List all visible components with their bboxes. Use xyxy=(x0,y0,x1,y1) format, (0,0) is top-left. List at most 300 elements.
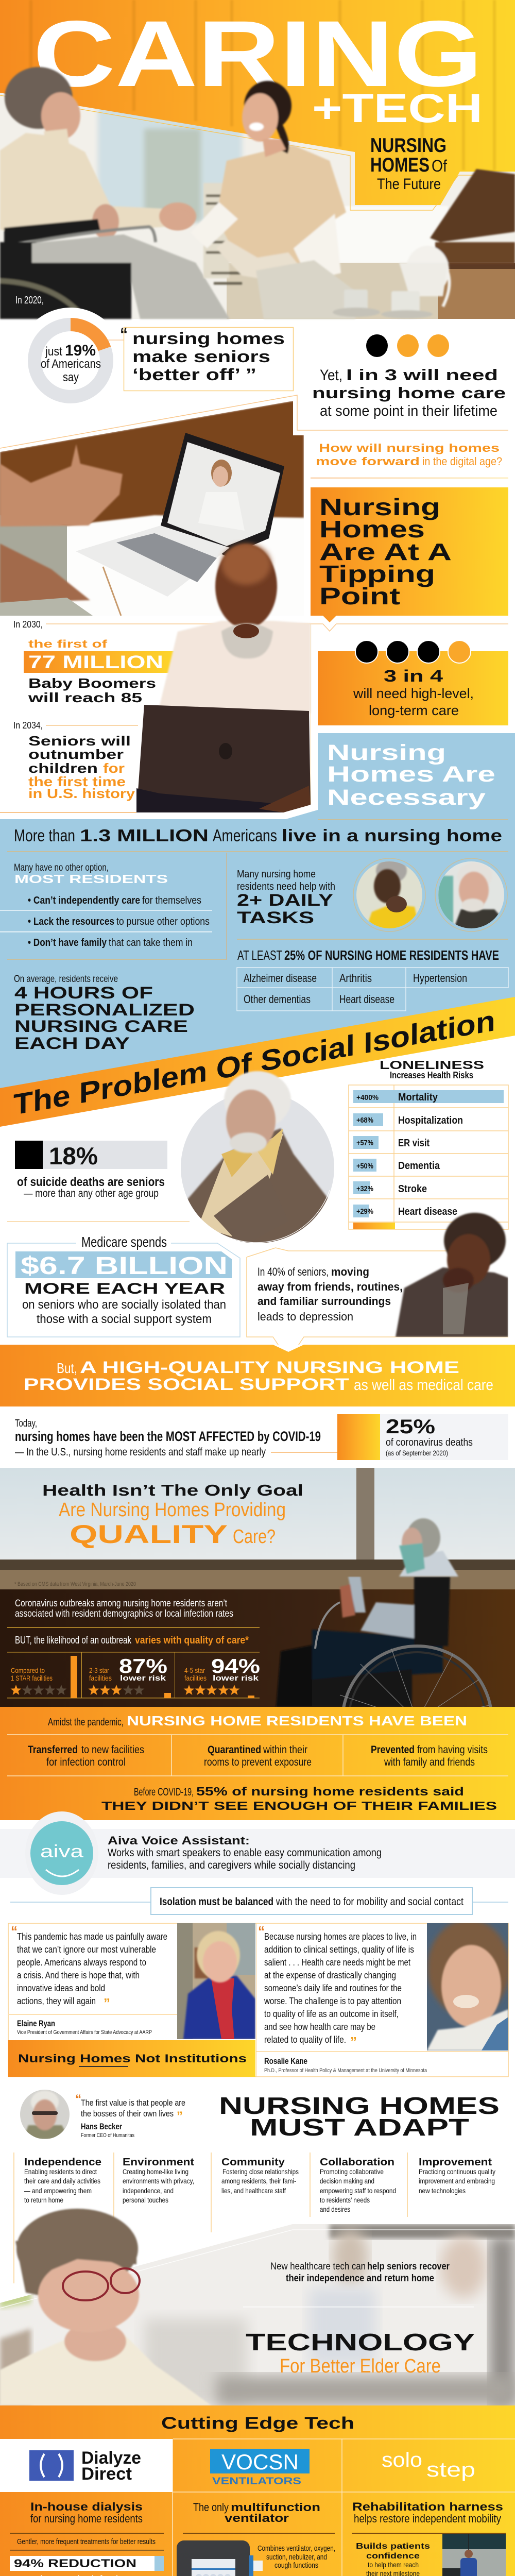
logo: vocsn ventilators: VOCSN xyxy=(221,2450,299,2474)
text: 4 hours of care: 4 HOURS OF xyxy=(14,984,153,1002)
band: residents during the pandemic: 55% of nursing home residents said xyxy=(196,1785,464,1798)
photo: hans becker xyxy=(20,2090,70,2140)
quote: hans becker: the bosses of their own lives xyxy=(81,2109,174,2119)
value labels: +68% xyxy=(356,1116,373,1125)
subtitle: NURSING xyxy=(370,134,447,157)
column: rehabilitation harness: confidence xyxy=(366,2552,420,2561)
values: improvement: new technologies xyxy=(419,2187,466,2195)
title +TECH: +TECH xyxy=(312,85,483,131)
quote: hans becker: The first value is that people are xyxy=(81,2098,185,2108)
panel: 3 in 4: will need high-level, xyxy=(353,686,474,701)
column: ventilator: ventilator xyxy=(225,2512,289,2524)
values: collaboration: to residents’ needs xyxy=(320,2196,370,2204)
panel: 3 in 4 xyxy=(318,640,508,725)
value labels: +57% xyxy=(356,1139,373,1147)
table: resident conditions: Arthritis xyxy=(339,972,372,985)
list: most residents: • Can’t independently care xyxy=(28,895,140,906)
logo: vocsn ventilators xyxy=(210,2449,310,2487)
table: resident conditions: AT LEAST xyxy=(237,947,282,963)
callout: medicare spends: Medicare spends xyxy=(81,1234,167,1250)
heading: technology: TECHNOLOGY xyxy=(246,2329,475,2355)
stat: 18 percent suicide: 18% xyxy=(49,1142,98,1170)
text: baby boomers timeline xyxy=(0,619,175,813)
table: resident conditions: Alzheimer disease xyxy=(244,972,317,985)
statistic: 1 in 3 xyxy=(312,334,506,419)
four to five star column: 4-5 star xyxy=(184,1666,205,1674)
value labels: +400% xyxy=(356,1093,379,1102)
band: residents during the pandemic: rooms to prevent exposure xyxy=(204,1756,312,1768)
heading box: tipping point xyxy=(311,487,508,622)
text: 4 hours of care: PERSONALIZED xyxy=(14,1001,195,1019)
band: residents during the pandemic: for infection control xyxy=(46,1756,126,1768)
text: outbreak association: Coronavirus outbreaks among nursing home residents aren’t xyxy=(15,1598,228,1609)
one star column: Compared to xyxy=(11,1666,45,1674)
text: outbreak association: associated with resident demographics or local infection rates xyxy=(15,1608,233,1619)
subtitle xyxy=(370,134,447,193)
callout: medicare spends: on seniors who are socially isolated than xyxy=(22,1298,226,1312)
band: quality nursing home social support: PROVIDES SOCIAL SUPPORT xyxy=(24,1375,350,1394)
value labels: +50% xyxy=(356,1162,373,1171)
image: ventilator device xyxy=(177,2540,263,2576)
donut chart: 19 percent: just xyxy=(45,345,62,359)
patient in wheelchair xyxy=(275,1577,492,1707)
two to three star column: facilities xyxy=(89,1674,112,1682)
quote: hans becker: Hans Becker xyxy=(81,2122,122,2131)
blurred clinic background xyxy=(0,2215,515,2406)
wood grain streaks xyxy=(31,0,494,170)
stat: 18 percent suicide: — more than any other age group xyxy=(24,1188,159,1199)
logo tile: dialyze direct: Direct xyxy=(81,2464,132,2484)
panel: aiva voice assistant: residents, families, and caregivers while socially distancing xyxy=(108,1859,355,1871)
quote: rosalie kane: and see how health care may be xyxy=(264,2022,375,2032)
list: most residents xyxy=(0,862,212,948)
table: resident conditions: Other dementias xyxy=(244,993,311,1006)
photo: elaine ryan xyxy=(177,1923,255,2039)
values: collaboration: Collaboration xyxy=(320,2157,394,2168)
values: environment: environments with privacy, xyxy=(123,2177,194,2185)
values: environment: independence, and xyxy=(123,2187,174,2195)
four to five star column xyxy=(183,1655,260,1695)
heading box: tipping point: Tipping xyxy=(319,561,435,587)
stat: 25 percent of coronavirus deaths xyxy=(337,1414,508,1460)
photo: older man on laptop xyxy=(136,544,311,812)
callout: nursing homes not institutions: Nursing Homes Not Institutions xyxy=(18,2052,247,2065)
quote: rosalie kane: at the expense of drastically changing xyxy=(264,1970,396,1980)
callout: moving leads to depression: away from friends, routines, xyxy=(258,1280,403,1293)
values: independence: Independence xyxy=(24,2157,101,2168)
callout: isolation must be balanced: Isolation must be balanced xyxy=(160,1896,273,1908)
callout: medicare spends: those with a social support system xyxy=(37,1312,212,1326)
values: collaboration: decision making and xyxy=(320,2177,374,2185)
quote: elaine ryan: innovative ideas and bold xyxy=(17,1983,105,1993)
text: 4 hours of care: NURSING CARE xyxy=(14,1017,188,1036)
callout: isolation must be balanced: with the need to for mobility and social contact xyxy=(276,1896,464,1908)
quote: rosalie kane: Rosalie Kane xyxy=(264,2056,307,2066)
column: ventilator: Combines ventilator, oxygen, xyxy=(258,2544,335,2553)
text: baby boomers timeline: in U.S. history xyxy=(28,786,135,801)
one star column: 1 STAR facilities xyxy=(11,1674,53,1682)
table: resident conditions: Heart disease xyxy=(339,993,394,1006)
list: most residents: that can take them in xyxy=(109,937,193,948)
quote box xyxy=(108,325,294,391)
column: ventilator xyxy=(177,2501,337,2576)
panel: technology for better elder care xyxy=(0,2209,515,2406)
statistic: 1 in 3: I in 3 will need xyxy=(346,366,498,384)
panel: aiva voice assistant: Works with smart speakers to enable easy communication among xyxy=(108,1847,382,1859)
logo: solostep: solo xyxy=(382,2449,422,2471)
photo: laptop telehealth xyxy=(0,397,309,618)
logo: solostep: step xyxy=(426,2459,475,2481)
value labels: Dementia xyxy=(398,1160,440,1172)
quote: hans becker: “ xyxy=(75,2092,81,2106)
panel: 19% public opinion xyxy=(18,308,506,419)
values: environment: Environment xyxy=(123,2157,194,2168)
statistic: 1 in 3: Yet, xyxy=(320,367,342,384)
hero photo background xyxy=(0,88,515,319)
list: most residents: • Don’t have family xyxy=(28,937,107,948)
text: covid-19 impact: — In the U.S., nursing home residents and staff make up nearly xyxy=(15,1446,266,1458)
panel: expert quotes xyxy=(8,1919,510,2077)
chart: loneliness health risks: Increases Health Risks xyxy=(390,1070,473,1080)
rule xyxy=(237,939,508,940)
keyline xyxy=(0,2230,515,2308)
values: independence xyxy=(24,2157,101,2204)
quote: elaine ryan: “ xyxy=(11,1923,18,1939)
heading: nursing homes must adapt: NURSING HOMES xyxy=(219,2092,500,2119)
column rules xyxy=(14,2153,407,2283)
callout: medicare spends xyxy=(7,1234,240,1337)
text: 4 hours of care: On average, residents receive xyxy=(14,974,118,985)
photo: resident woman xyxy=(353,858,425,931)
headline: 1.3 million: Americans xyxy=(213,826,277,845)
timeline line with notch xyxy=(46,624,508,631)
text: baby boomers timeline: 77 MILLION xyxy=(28,652,163,672)
icon: red glasses xyxy=(63,2268,140,2300)
column: rehabilitation harness xyxy=(352,2500,506,2576)
column: dialysis xyxy=(10,2500,164,2576)
text: outbreak association: varies with quality of care* xyxy=(135,1635,249,1646)
heading box: tipping point: Point xyxy=(319,583,400,609)
quote: elaine ryan: a crisis. And there is hope that, with xyxy=(17,1970,140,1980)
values: environment: Creating home-like living xyxy=(123,2168,188,2176)
column: dialysis: In-house dialysis xyxy=(30,2500,143,2513)
stat: 18 percent suicide: of suicide deaths are seniors xyxy=(17,1175,165,1189)
quote: hans becker: Former CEO of Humanitas xyxy=(81,2132,134,2139)
photo: wooden box and teaware xyxy=(333,169,515,318)
heading: technology: For Better Elder Care xyxy=(280,2355,441,2377)
panel: 3 in 4: 3 in 4 xyxy=(384,667,443,685)
gradient footer cell xyxy=(353,1223,395,1229)
values: improvement xyxy=(419,2157,495,2195)
risk bars xyxy=(71,1656,254,1698)
photo: resident man xyxy=(435,858,507,931)
list: most residents: MOST RESIDENTS xyxy=(14,872,168,886)
values: collaboration: Promoting collaborative xyxy=(320,2168,384,2176)
question: digital age: in the digital age? xyxy=(422,455,502,468)
quote: elaine ryan: Elaine Ryan xyxy=(17,2019,55,2028)
band: residents during the pandemic: THEY DIDN’T SEE ENOUGH OF THEIR FAMILIES xyxy=(101,1799,497,1812)
callout: moving leads to depression xyxy=(247,1248,508,1360)
values: community: Community xyxy=(221,2157,285,2168)
column: ventilator: suction, nebulizer, and xyxy=(266,2553,327,2562)
column: ventilator: The only xyxy=(193,2501,229,2514)
values: community xyxy=(221,2157,299,2195)
band: quality nursing home social support: But, xyxy=(57,1360,77,1376)
text: 2+ daily tasks xyxy=(237,869,335,927)
band: residents during the pandemic: with family and friends xyxy=(384,1756,475,1768)
quote: elaine ryan: Vice President of Government Affairs for State Advocacy at AARP xyxy=(17,2029,152,2036)
heading: nursing homes are necessary: Nursing xyxy=(327,740,446,765)
connector line around laptop photo xyxy=(0,395,508,448)
heading: nursing homes must adapt xyxy=(219,2092,500,2141)
headline: 1.3 million: More than xyxy=(14,826,75,845)
heading: nursing homes are necessary: Necessary xyxy=(327,785,486,810)
list: most residents: • Lack the resources xyxy=(28,916,114,927)
value labels: +29% xyxy=(356,1207,373,1216)
values: environment: personal touches xyxy=(123,2196,168,2204)
quote: rosalie kane: salient . . . Health care needs might be met xyxy=(264,1957,410,1968)
title CARING: CARING xyxy=(33,1,483,106)
quote: rosalie kane: addition to clinical settings, quality of life is xyxy=(264,1944,414,1955)
band: quality nursing home social support: A HIGH-QUALITY NURSING HOME xyxy=(80,1358,459,1377)
quote: elaine ryan: This pandemic has made us painfully aware xyxy=(17,1931,167,1942)
quote box: nursing homes xyxy=(132,329,285,348)
column: dialysis: for nursing home residents xyxy=(30,2512,143,2525)
four to five star column: lower risk xyxy=(213,1674,259,1683)
four to five star column: 94% xyxy=(211,1655,260,1677)
quote: elaine ryan: that we can’t ignore our most vulnerable xyxy=(17,1944,156,1955)
chart: loneliness health risks: LONELINESS xyxy=(380,1058,484,1072)
statistic: 1 in 3: at some point in their lifetime xyxy=(320,403,497,419)
text: new healthcare tech: help seniors recover xyxy=(367,2261,450,2272)
photo: thinking man xyxy=(396,1213,508,1337)
stat: 25 percent of coronavirus deaths: (as of September 2020) xyxy=(386,1449,448,1457)
values: collaboration: and desires xyxy=(320,2206,350,2213)
values: collaboration: empowering staff to respond xyxy=(320,2187,396,2195)
text: 2+ daily tasks: 2+ DAILY xyxy=(237,891,333,909)
value labels: ER visit xyxy=(398,1138,430,1149)
band: residents during the pandemic: Before COVID-19, xyxy=(134,1786,194,1798)
text: baby boomers timeline: Baby Boomers xyxy=(28,675,156,691)
table: resident conditions: Hypertension xyxy=(413,972,467,985)
heading: technology xyxy=(246,2329,475,2377)
subtitle: The Future xyxy=(377,176,441,193)
quote: rosalie kane: someone’s daily life and routines for the xyxy=(264,1983,402,1993)
text: 4 hours of care xyxy=(14,974,195,1053)
list: most residents: to pursue other options xyxy=(116,916,210,927)
logo: solostep xyxy=(382,2449,475,2481)
heading: nursing homes must adapt: MUST ADAPT xyxy=(250,2114,469,2141)
bars xyxy=(353,1090,504,1217)
photo: smiling older woman with glasses xyxy=(0,2209,211,2405)
panel: 3 in 4: long-term care xyxy=(369,703,459,718)
heading: nursing homes are necessary xyxy=(318,740,508,820)
photo: isolated older man xyxy=(181,1071,335,1247)
question: digital age: move forward xyxy=(316,455,420,468)
caption In 2020: In 2020, xyxy=(15,295,44,306)
column: rehabilitation harness: Rehabilitation harness xyxy=(352,2500,503,2513)
quote: rosalie kane: Ph.D., Professor of Health Policy & Management at the University of Minnesota xyxy=(264,2067,427,2074)
text: covid-19 impact: nursing homes have been the MOST AFFECTED by COVID-19 xyxy=(15,1429,321,1444)
stat: 25 percent of coronavirus deaths: of coronavirus deaths xyxy=(386,1437,473,1448)
two to three star column: lower risk xyxy=(120,1674,166,1683)
text: outbreak association: BUT, the likelihood of an outbreak xyxy=(15,1635,132,1646)
quote: elaine ryan: actions, they will again xyxy=(17,1996,96,2006)
heading: health isn't the only goal: QUALITY xyxy=(70,1520,228,1549)
quote: rosalie kane: “ xyxy=(258,1923,265,1939)
quote: elaine ryan: ” xyxy=(104,1995,110,2011)
values: collaboration xyxy=(320,2157,396,2213)
donut chart: 19 percent: of Americans xyxy=(41,357,101,371)
quote: rosalie kane: Because nursing homes are places to live, in xyxy=(264,1931,417,1942)
band: residents during the pandemic: NURSING HOME RESIDENTS HAVE BEEN xyxy=(127,1713,467,1728)
callout: moving leads to depression: In 40% of seniors, xyxy=(258,1265,329,1278)
table: resident conditions xyxy=(237,947,508,1011)
heading: nursing homes are necessary: Homes Are xyxy=(327,762,495,787)
column: dialysis: Gentler, more frequent treatments for better results xyxy=(17,2537,156,2546)
band: residents during the pandemic: Quarantined xyxy=(208,1744,261,1756)
headline: 1.3 million xyxy=(7,826,508,960)
text: new healthcare tech: their independence and return home xyxy=(286,2273,434,2284)
photo: patient in harness xyxy=(442,2534,506,2576)
column: dialysis: 94% REDUCTION xyxy=(14,2557,136,2570)
values: independence: their care and daily activities xyxy=(24,2177,100,2185)
callout: nursing homes not institutions xyxy=(8,2040,255,2077)
text: covid-19 impact xyxy=(15,1418,337,1458)
banner: the problem of social isolation: The Problem Of Social Isolation xyxy=(13,1004,495,1121)
subtitle: Of xyxy=(432,157,447,175)
values: environment xyxy=(123,2157,194,2204)
column: ventilator: multifunction xyxy=(231,2501,320,2514)
text: baby boomers timeline: In 2030, xyxy=(13,619,43,630)
band: quality nursing home social support: as well as medical care xyxy=(354,1377,493,1394)
quote: rosalie kane: to quality of life as an outcome in itself, xyxy=(264,2009,399,2019)
column: rehabilitation harness: Builds patients xyxy=(356,2542,430,2551)
text: baby boomers timeline: the first of xyxy=(28,638,108,650)
quote box: make seniors xyxy=(132,347,270,366)
text: new healthcare tech xyxy=(243,2261,474,2307)
quote box: ‘better off’ ” xyxy=(132,365,256,384)
text: covid-19 impact: Today, xyxy=(15,1418,37,1429)
headline: 1.3 million: live in a nursing home xyxy=(282,826,502,845)
quote: rosalie kane: worse. The challenge is to pay attention xyxy=(264,1996,401,2006)
text: baby boomers timeline: Seniors will xyxy=(28,733,131,749)
value labels: Heart disease xyxy=(398,1206,457,1217)
callout: moving leads to depression: moving xyxy=(331,1265,369,1278)
heading: health isn't the only goal xyxy=(42,1481,303,1549)
column: ventilator: cough functions xyxy=(274,2561,318,2570)
text: 2+ daily tasks: residents need help with xyxy=(237,881,335,892)
donut chart: 19 percent xyxy=(18,308,124,414)
list: most residents: Many have no other option, xyxy=(14,862,109,873)
value labels xyxy=(356,1092,463,1217)
subtitle: HOMES xyxy=(370,154,430,176)
hero panel xyxy=(0,0,515,319)
values: independence: to return home xyxy=(24,2196,63,2204)
callout: moving leads to depression: and familiar surroundings xyxy=(258,1295,391,1308)
heading box: tipping point: Are At A xyxy=(319,538,452,565)
quote: rosalie kane: ” xyxy=(350,2034,357,2049)
donut chart: 19 percent: say xyxy=(63,370,79,384)
logo tile: dialyze direct: Dialyze xyxy=(81,2448,141,2468)
band: residents during the pandemic xyxy=(0,1707,515,1820)
text: baby boomers timeline: for xyxy=(103,760,125,776)
question: digital age xyxy=(311,442,508,478)
panel: cutting edge tech xyxy=(0,2405,515,2576)
column: rehabilitation harness: to help them reach xyxy=(368,2561,419,2569)
values: independence: — and empowering them xyxy=(24,2187,92,2195)
values: community: lies, and healthcare staff xyxy=(221,2187,286,2195)
text: outbreak association xyxy=(7,1598,260,1653)
band: residents during the pandemic: Prevented xyxy=(371,1744,415,1756)
one star column xyxy=(10,1666,67,1695)
photo: rosalie kane xyxy=(427,1919,510,2050)
values: improvement: Practicing continuous quality xyxy=(419,2168,495,2176)
callout: medicare spends: $6.7 BILLION xyxy=(21,1252,228,1280)
band: residents during the pandemic: Amidst the pandemic, xyxy=(48,1717,124,1728)
value labels: Stroke xyxy=(398,1183,427,1195)
chart: loneliness health risks xyxy=(349,1058,508,1229)
aiva logo xyxy=(25,1811,98,1895)
aiva logo: aiva xyxy=(40,1842,83,1861)
band: residents during the pandemic: to new facilities xyxy=(81,1744,144,1756)
panel: aiva voice assistant xyxy=(0,1811,515,1895)
banner: the problem of social isolation xyxy=(0,997,515,1127)
heading: cutting edge tech: Cutting Edge Tech xyxy=(161,2414,354,2432)
heading box: tipping point: Homes xyxy=(319,516,425,543)
quote: rosalie kane: related to quality of life. xyxy=(264,2035,346,2045)
values: community: Fostering close relationships xyxy=(222,2168,299,2176)
logo: vocsn ventilators: VENTILATORS xyxy=(212,2476,301,2487)
text: 2+ daily tasks: Many nursing home xyxy=(237,869,316,880)
heading: health isn't the only goal: Are Nursing Homes Providing xyxy=(59,1499,286,1521)
heading box: tipping point: Nursing xyxy=(319,494,440,520)
callout: medicare spends: MORE EACH YEAR xyxy=(24,1280,225,1297)
two to three star column: 2-3 star xyxy=(89,1666,109,1674)
blue background panel xyxy=(0,733,515,1090)
quote: hans becker: ” xyxy=(177,2109,183,2123)
text: baby boomers timeline: will reach 85 xyxy=(28,690,142,705)
band: residents during the pandemic: from having visits xyxy=(417,1744,488,1756)
headline: 1.3 million: 1.3 MILLION xyxy=(80,826,209,845)
band: residents during the pandemic: within their xyxy=(263,1744,307,1756)
question: digital age: How will nursing homes xyxy=(319,442,500,454)
footnote: * Based on CMS data from West Virginia, March-June 2020 xyxy=(14,1581,136,1587)
logo tile: dialyze direct xyxy=(0,2439,173,2492)
two to three star column: 87% xyxy=(119,1655,167,1677)
stat: 18 percent suicide xyxy=(7,1141,190,1222)
callout: isolation must be balanced xyxy=(10,1888,508,1914)
text: 4 hours of care: EACH DAY xyxy=(14,1034,130,1053)
text: 2+ daily tasks: TASKS xyxy=(237,908,314,927)
quote: elaine ryan xyxy=(8,1923,177,2036)
donut chart: 19 percent: 19% xyxy=(65,342,96,359)
value labels: Mortality xyxy=(398,1092,438,1103)
band: residents during the pandemic: Transferred xyxy=(28,1744,78,1756)
band: quality nursing home social support xyxy=(0,1345,515,1406)
value labels: +32% xyxy=(356,1184,373,1193)
photo: smiling nurse xyxy=(163,81,355,319)
value labels: Hospitalization xyxy=(398,1115,463,1126)
stat: 25 percent of coronavirus deaths: 25% xyxy=(386,1416,435,1438)
values: community: among residents, their fami- xyxy=(221,2177,296,2185)
heading: health isn't the only goal: Health Isn’t The Only Goal xyxy=(42,1481,303,1499)
thin gold keyline xyxy=(0,95,515,210)
chart: star ratings outbreak risk xyxy=(7,1652,260,1698)
window wall background xyxy=(0,1468,515,1707)
gold diagonal header shape xyxy=(0,0,515,205)
patient head with mask xyxy=(399,1518,458,1577)
